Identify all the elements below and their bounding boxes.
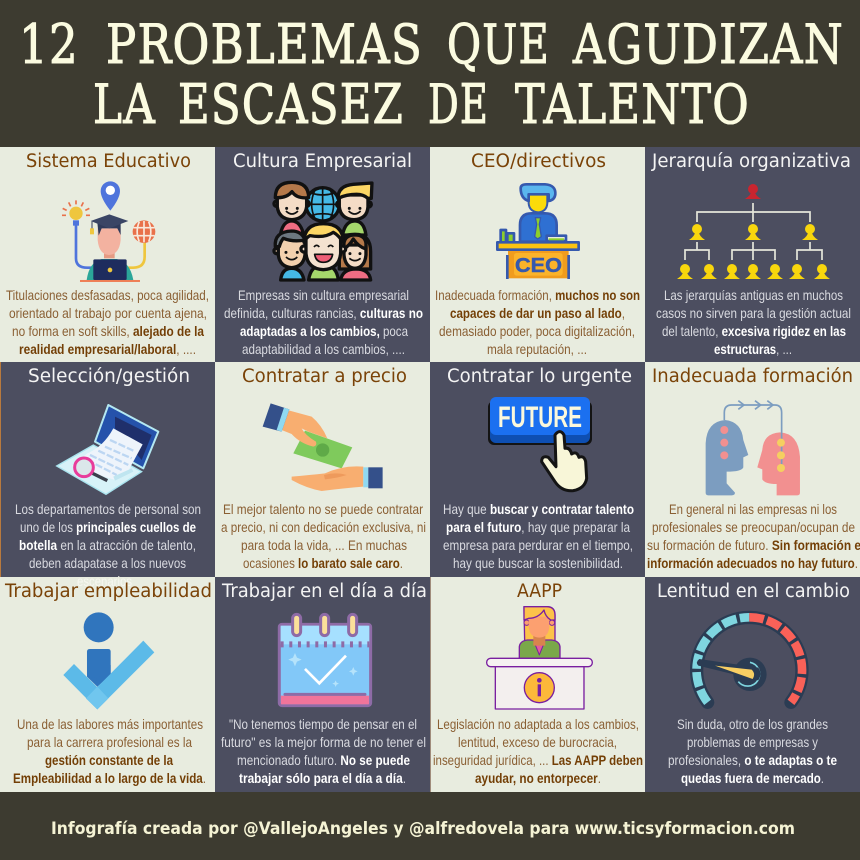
icon: CEO at desk xyxy=(497,184,579,279)
heading: Contratar lo urgente xyxy=(447,366,632,387)
text block: "No tenemos tiempo de pensar en el xyxy=(229,716,417,732)
icon: calendar with check xyxy=(279,614,371,706)
panel: Lentitud en el cambio xyxy=(645,577,860,792)
heading: Jerarquía organizativa xyxy=(651,151,851,172)
panel: Inadecuada formación xyxy=(645,362,860,577)
text block: hay que buscar la sostenibilidad. xyxy=(453,555,623,571)
text block: Empresas sin cultura empresarial xyxy=(238,287,409,303)
text block: adaptabilidad a los cambios, .... xyxy=(242,341,405,357)
text block: no forma en soft skills, alejado de la xyxy=(12,323,204,339)
heading: Trabajar empleabilidad xyxy=(4,581,212,602)
panel: Selección/gestión xyxy=(0,362,215,577)
title: TALENTO xyxy=(515,73,750,136)
text block: a precio, ni con dedicación exclusiva, ni xyxy=(221,519,426,535)
text block: deben adapatase a los nuevos xyxy=(29,555,186,571)
title: 12 xyxy=(19,13,79,76)
text block: para el futuro, hay que preparar la xyxy=(446,519,630,535)
icon: future button and hand xyxy=(488,397,592,491)
text block: ayudar, no entorpecer. xyxy=(475,770,601,786)
CEO label: CEO xyxy=(515,255,562,277)
text block: problemas de empresas y xyxy=(687,734,818,750)
text block: futuro" es la mejor forma de no tener el xyxy=(221,734,426,750)
text block xyxy=(435,287,640,357)
text block: quedas fuera de mercado. xyxy=(681,770,824,786)
text block xyxy=(647,501,860,571)
overflowing text: escenarios xyxy=(77,573,132,589)
text block xyxy=(656,287,851,357)
text block: trabajar sólo para el día a día. xyxy=(239,770,406,786)
panel: Cultura Empresarial xyxy=(215,147,430,362)
icon: hands exchanging money xyxy=(263,403,383,491)
panel: AAPP xyxy=(430,577,645,792)
text block: ocasiones lo barato sale caro. xyxy=(243,555,403,571)
text block: empresa para perdurar en el tiempo, xyxy=(443,537,633,553)
text block: inseguridad jurídica, ... Las AAPP deben xyxy=(433,752,643,768)
text block: para toda la vida, ... En muchas xyxy=(241,537,407,553)
panel: Trabajar empleabilidad xyxy=(0,573,215,792)
panel: Trabajar en el día a día xyxy=(215,577,430,792)
panel: Contratar lo urgente xyxy=(430,362,645,577)
icon: person with check mark xyxy=(63,612,154,709)
text block: realidad empresarial/laboral, .... xyxy=(19,341,196,357)
text block xyxy=(224,287,423,357)
title: DE xyxy=(428,73,489,136)
heading: Cultura Empresarial xyxy=(233,151,412,172)
panel: Sistema Educativo xyxy=(0,147,215,362)
text block: El mejor talento no se puede contratar xyxy=(223,501,423,517)
text block: Hay que buscar y contratar talento xyxy=(443,501,634,517)
text block: Los departamentos de personal son xyxy=(15,501,201,517)
text block: definida, culturas rancias, culturas no xyxy=(224,305,423,321)
text block xyxy=(6,287,209,357)
text block xyxy=(221,716,426,786)
text block: mala reputación, ... xyxy=(487,341,587,357)
text block: uno de los principales cuellos de xyxy=(20,519,196,535)
text block xyxy=(13,716,206,786)
heading: Inadecuada formación xyxy=(652,366,853,387)
text block xyxy=(443,501,634,571)
text block: estructuras, ... xyxy=(714,341,792,357)
heading: Selección/gestión xyxy=(28,366,190,387)
text block: Sin duda, otro de los grandes xyxy=(677,716,828,732)
heading: CEO/directivos xyxy=(471,151,606,172)
icon: person at information desk xyxy=(487,607,592,709)
heading: Sistema Educativo xyxy=(26,151,191,172)
footer credit: Infografía creada por @VallejoAngeles y @alfredovela para www.ticsyformacion.com xyxy=(51,819,795,839)
text block: lentitud, exceso de burocracia, xyxy=(458,734,617,750)
text block: demasiado poder, poca digitalización, xyxy=(439,323,635,339)
text block: Una de las labores más importantes xyxy=(17,716,203,732)
text block: orientado al trabajo por cuenta ajena, xyxy=(9,305,207,321)
text block: Titulaciones desfasadas, poca agilidad, xyxy=(6,287,209,303)
panel: CEO/directivos xyxy=(430,147,645,362)
icon: speedometer xyxy=(697,617,802,702)
text block: capaces de dar un paso al lado, xyxy=(450,305,625,321)
title xyxy=(19,13,844,136)
text block: mencionado futuro. No se puede xyxy=(237,752,410,768)
text block xyxy=(221,501,426,571)
button label: FUTURE xyxy=(498,401,582,434)
heading: AAPP xyxy=(517,581,562,602)
heading: Contratar a precio xyxy=(242,366,407,387)
text block: adaptadas a los cambios, poca xyxy=(240,323,408,339)
icon: laptop with document and magnifier xyxy=(57,405,158,494)
icon: two heads with arrows xyxy=(706,401,800,495)
panel: Contratar a precio xyxy=(215,362,430,577)
text block: gestión constante de la xyxy=(45,752,173,768)
heading: Lentitud en el cambio xyxy=(657,581,850,602)
text block xyxy=(668,716,837,786)
icon: graduate with laptop xyxy=(62,181,155,282)
title: QUE xyxy=(447,13,550,76)
heading: Trabajar en el día a día xyxy=(221,581,427,602)
icon: group of people and globe xyxy=(274,182,372,280)
title: PROBLEMAS xyxy=(106,13,423,76)
panel: Jerarquía organizativa xyxy=(645,147,860,362)
icon: org chart xyxy=(677,184,830,279)
text block: Empleabilidad a lo largo de la vida. xyxy=(13,770,206,786)
title: LA xyxy=(93,73,156,136)
text block: para la carrera profesional es la xyxy=(27,734,192,750)
text block xyxy=(433,716,643,786)
text block: botella en la atracción de talento, xyxy=(19,537,196,553)
text block: profesionales, o te adaptas o te xyxy=(668,752,837,768)
title: ESCASEZ xyxy=(178,73,404,136)
text block xyxy=(15,501,201,571)
text block: Legislación no adaptada a los cambios, xyxy=(437,716,639,732)
text block: Inadecuada formación, muchos no son xyxy=(435,287,640,303)
